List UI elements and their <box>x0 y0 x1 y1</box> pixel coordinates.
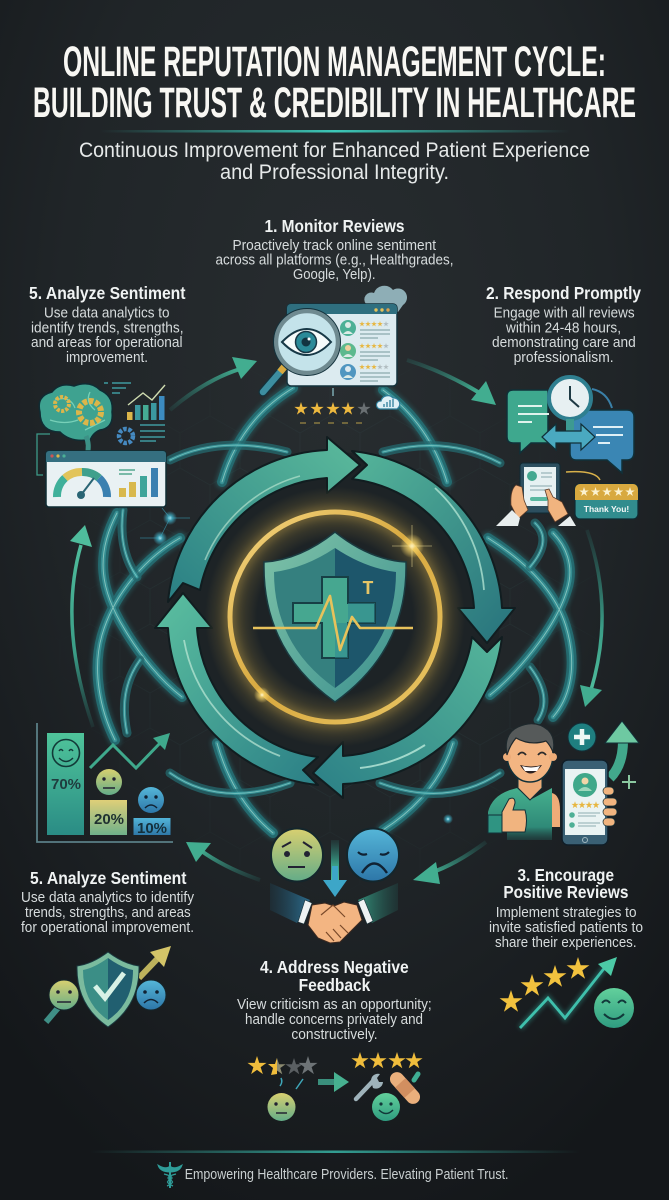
thumbs up hand <box>502 798 526 832</box>
right arm <box>552 793 560 827</box>
brain <box>39 384 112 448</box>
clock <box>592 389 612 408</box>
hexagon pattern <box>165 532 506 789</box>
neutral face <box>49 980 79 1010</box>
subtitle: and Professional Integrity. <box>220 160 449 184</box>
arrow to step 3 <box>580 530 602 707</box>
step 2 text: professionalism. <box>514 350 614 366</box>
step 3 text: Positive Reviews <box>503 882 629 902</box>
bandage <box>387 1069 423 1107</box>
arrow <box>318 1072 349 1092</box>
subtitle <box>79 138 590 184</box>
analyze sentiment text, lower left: for operational improvement. <box>21 920 194 936</box>
arrow to step 1 <box>170 357 257 410</box>
step 3 text <box>489 865 643 951</box>
step 1 text: Proactively track online sentiment <box>232 238 436 254</box>
background orbit bands <box>98 388 572 833</box>
dashboard <box>46 451 166 507</box>
step 1 text: across all platforms (e.g., Healthgrades, <box>216 252 454 268</box>
up arrow <box>610 741 623 778</box>
happy face <box>372 1093 400 1121</box>
handle <box>46 1002 63 1022</box>
step 4 text: 4. Address Negative <box>260 957 409 977</box>
step 1 text: 1. Monitor Reviews <box>264 216 405 236</box>
icon: respond promptly <box>496 377 638 526</box>
icon: faces and handshake <box>270 828 399 943</box>
yellow bar 20%: 20% <box>94 811 124 828</box>
footer divider <box>90 1150 580 1153</box>
small plus <box>622 775 636 789</box>
stem and bracket <box>86 436 88 455</box>
check mark <box>95 973 124 998</box>
thank you badge <box>566 472 600 480</box>
green speech bubble <box>507 390 548 453</box>
low rating stars <box>247 1056 318 1075</box>
analyze sentiment text, top left: identify trends, strengths, <box>31 320 184 336</box>
top charts <box>127 412 132 420</box>
center shield icon <box>253 532 413 702</box>
icon: smiling provider with phone <box>488 721 639 845</box>
dashboard bars <box>119 488 126 497</box>
plus badge <box>568 723 596 751</box>
icon: shield with faces <box>46 946 171 1027</box>
cloud <box>364 286 407 312</box>
gold arrow <box>139 955 161 978</box>
happy face <box>594 988 634 1028</box>
tablet <box>520 463 560 513</box>
neutral face <box>268 1093 296 1121</box>
step 2 text <box>486 283 641 366</box>
footer tagline: Empowering Healthcare Providers. Elevating Patient Trust. <box>185 1167 508 1183</box>
sad face <box>138 787 164 813</box>
step 1 text <box>216 216 454 283</box>
cycle arrow: bottom left <box>155 593 318 785</box>
analyze sentiment text, top left: Use data analytics to <box>44 306 170 322</box>
blue sparks <box>140 423 453 824</box>
hands <box>308 902 362 943</box>
sad face <box>136 980 166 1010</box>
cycle connector arrows <box>70 357 602 884</box>
step 2 text: within 24-48 hours, <box>505 320 621 336</box>
step 4 text: Feedback <box>299 975 371 995</box>
high rating stars <box>351 1052 423 1068</box>
analyze sentiment text, lower left: trends, strengths, and areas <box>25 905 191 921</box>
arrow to step 5 <box>186 842 260 880</box>
step 3 text: 3. Encourage <box>518 865 614 885</box>
step 3 text: Implement strategies to <box>496 905 636 921</box>
step 2 text: 2. Respond Promptly <box>486 283 641 303</box>
rating row <box>294 402 371 415</box>
blue bar 10%: 10% <box>137 820 167 837</box>
step 2 text: demonstrating care and <box>492 335 636 351</box>
sad face <box>347 828 399 882</box>
cycle arrow: bottom right <box>313 637 502 798</box>
step 4 text: handle concerns privately and <box>245 1012 423 1028</box>
step 2 text: Engage with all reviews <box>494 306 635 322</box>
step 3 text: share their experiences. <box>495 935 636 951</box>
double arrow <box>542 424 595 450</box>
heartbeat line <box>253 596 413 650</box>
title <box>33 38 636 127</box>
cycle arrow: top left <box>168 437 360 602</box>
body <box>488 788 552 840</box>
trend arrow <box>90 733 170 768</box>
down arrow <box>323 840 347 897</box>
gears <box>55 397 69 411</box>
analyze sentiment text, top left: 5. Analyze Sentiment <box>29 283 186 303</box>
wrench <box>356 1080 374 1099</box>
fingers <box>603 787 617 826</box>
magnifier <box>263 371 281 392</box>
analyze sentiment text, top left <box>29 283 186 366</box>
icon: monitor reviews <box>263 286 407 415</box>
step 3 text: invite satisfied patients to <box>489 920 643 936</box>
step 4 text: View criticism as an opportunity; <box>237 997 432 1013</box>
step 4 text <box>237 957 432 1043</box>
blue speech bubble <box>570 410 634 473</box>
arrow to step 2 <box>407 360 496 405</box>
phone <box>562 760 608 845</box>
row stars <box>359 321 389 369</box>
neutral face <box>96 769 122 795</box>
trust T mark: T <box>362 578 374 600</box>
step 1 text: Google, Yelp). <box>293 267 376 283</box>
sleeves <box>270 883 310 923</box>
icon: caduceus <box>158 1162 182 1188</box>
icon: respond promptly: Thank You! <box>584 504 629 514</box>
neck and head <box>518 772 542 800</box>
analyze sentiment text, top left: improvement. <box>66 350 148 366</box>
analyze sentiment text, lower left <box>21 868 195 936</box>
icon: feedback recovery <box>247 1052 423 1121</box>
reviewer avatars <box>340 320 356 380</box>
medical cross <box>293 577 375 658</box>
green bar 70%: 70% <box>51 776 81 793</box>
footer <box>158 1162 508 1188</box>
icon: sentiment bar chart <box>37 723 173 842</box>
arrow to analyze <box>70 525 93 727</box>
review window <box>287 304 397 386</box>
cycle arrow: top right <box>352 451 515 643</box>
subtitle: Continuous Improvement for Enhanced Patient Experience <box>79 138 590 162</box>
gauge <box>57 478 65 497</box>
worried face <box>271 828 323 882</box>
analyze sentiment text, top left: and areas for operational <box>31 335 182 351</box>
hands <box>511 485 528 519</box>
arrow to step 4 <box>413 842 486 884</box>
icon: stars and rising trend <box>500 957 634 1028</box>
gold ring <box>205 487 465 747</box>
shield <box>77 952 139 1027</box>
analyze sentiment text, lower left: Use data analytics to identify <box>21 890 195 906</box>
central cycle <box>155 437 515 798</box>
step 4 text: constructively. <box>291 1027 378 1043</box>
icon: analytics brain and dashboard <box>37 383 166 507</box>
small analytics cloud <box>376 396 400 409</box>
analyze sentiment text, lower left: 5. Analyze Sentiment <box>30 868 187 888</box>
